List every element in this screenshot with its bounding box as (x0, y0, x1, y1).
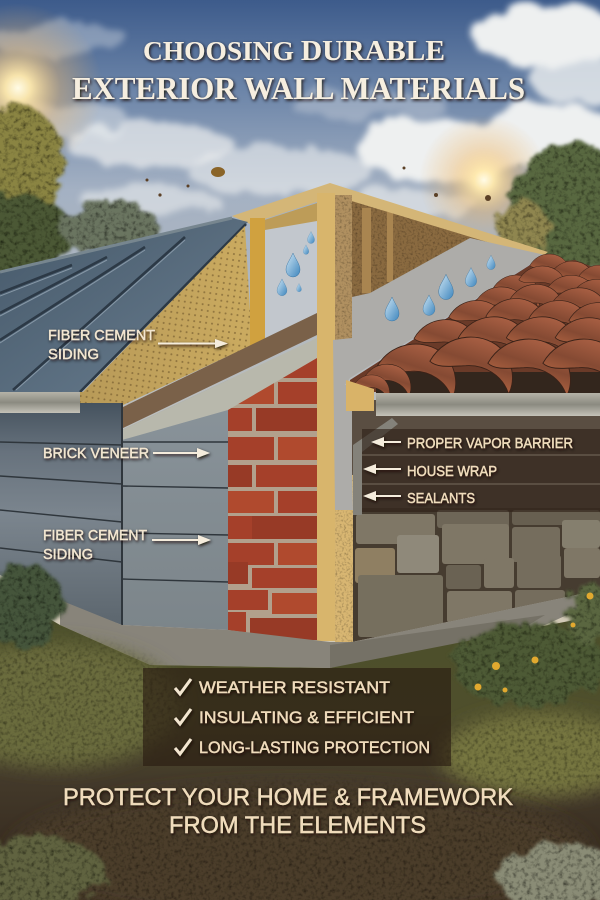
grass left (0, 643, 180, 767)
sky background (0, 0, 600, 680)
upper cavity panel (252, 203, 317, 236)
closing slogan: FROM THE ELEMENTS (169, 812, 426, 839)
foreground plants bottom right (498, 842, 600, 900)
foreground plants bottom left (0, 836, 105, 900)
label: fiber cement siding bottom: FIBER CEMENT (43, 527, 147, 544)
right label bands (362, 429, 600, 512)
bush right with flowers (452, 585, 600, 705)
title: CHOOSING DURABLE (143, 35, 445, 67)
label: brick veneer (43, 445, 210, 462)
dark wall behind right labels (352, 400, 600, 515)
trees left (0, 105, 160, 277)
water drops on membrane (385, 255, 495, 321)
label: proper vapor barrier: PROPER VAPOR BARRIER (407, 436, 573, 452)
stone wall (352, 508, 600, 643)
label: fiber cement siding top: FIBER CEMENT (48, 327, 155, 344)
grass right (440, 713, 600, 797)
title: EXTERIOR WALL MATERIALS (72, 70, 525, 106)
house wrap panel with drops (265, 221, 317, 338)
ground (0, 590, 600, 900)
house: back wall cavity right (352, 195, 545, 345)
flying debris (146, 166, 491, 201)
benefit: weather resistant: WEATHER RESISTANT (199, 678, 390, 697)
benefit: insulating and efficient: INSULATING & EFFICIENT (199, 708, 414, 727)
title (72, 35, 525, 106)
insulation lower (335, 475, 353, 642)
closing slogan: PROTECT YOUR HOME & FRAMEWORK (63, 784, 513, 811)
vertical wood stud (317, 193, 335, 641)
label: fiber cement siding top: SIDING (48, 346, 99, 363)
roof gutter left (0, 392, 80, 413)
diagonal wood beam (123, 313, 317, 428)
label: brick veneer: BRICK VENEER (43, 445, 149, 462)
trees right (496, 142, 600, 278)
closing slogan (63, 784, 513, 839)
roof seams (0, 224, 246, 392)
sun left (0, 3, 103, 173)
vapor membrane (333, 238, 545, 510)
label: fiber cement siding top (48, 327, 228, 363)
benefit: long-lasting protection: LONG-LASTING PROTECTION (199, 738, 430, 757)
wood fascia (346, 380, 374, 411)
sun right (419, 115, 549, 245)
bush left (0, 563, 64, 647)
clouds (0, 3, 600, 221)
tile roof (350, 248, 600, 400)
metal roof left (0, 218, 248, 392)
top wall plate (232, 183, 548, 258)
label: fiber cement siding bottom: SIDING (43, 546, 93, 563)
label: sealants: SEALANTS (407, 491, 475, 507)
wood studs right cavity (362, 208, 393, 293)
label: house wrap (363, 464, 497, 480)
spray foam strip (250, 218, 265, 346)
siding left (0, 338, 317, 630)
pegboard sheathing (80, 226, 252, 405)
label: house wrap: HOUSE WRAP (407, 464, 497, 480)
brick veneer (228, 355, 318, 645)
insulation upper (335, 195, 352, 345)
dirt path (10, 785, 590, 900)
label: fiber cement siding bottom (43, 527, 211, 563)
benefits panel (143, 668, 451, 766)
roof gutter right (376, 393, 600, 416)
concrete foundation (60, 590, 600, 668)
label: sealants (363, 491, 475, 507)
downspout (353, 418, 398, 515)
